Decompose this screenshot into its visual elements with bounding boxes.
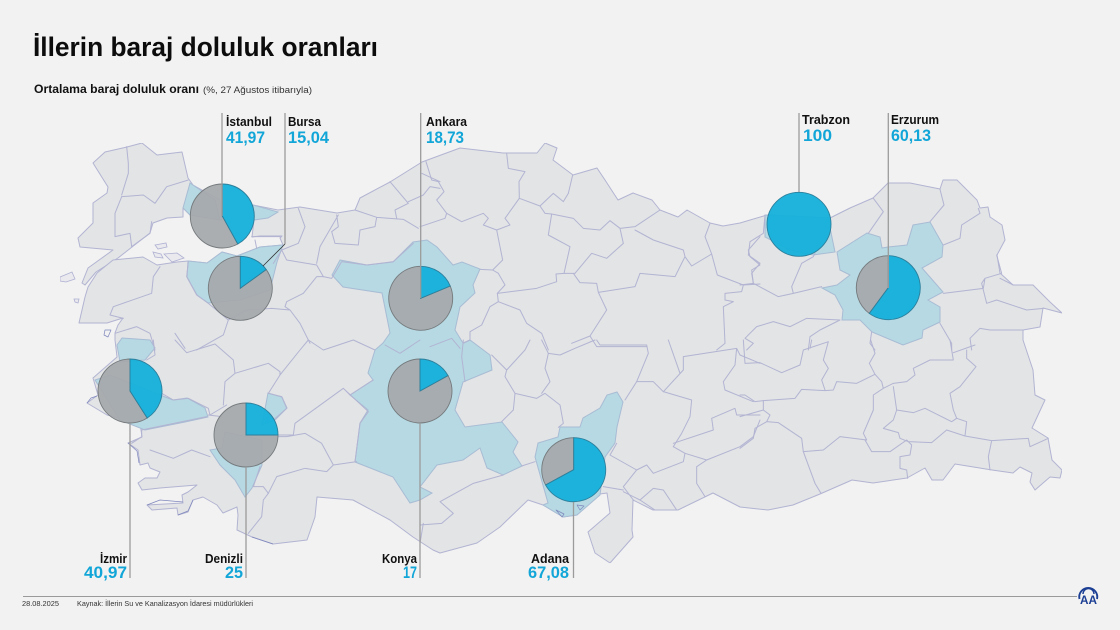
highlighted province: Trabzon (765, 215, 835, 255)
callout: İzmir 40,97: İzmir (100, 551, 127, 566)
subtitle (34, 84, 312, 96)
callout: Adana 67,08 (528, 438, 606, 582)
highlighted province: Denizli (210, 393, 287, 497)
callout: İzmir 40,97 (84, 359, 162, 582)
subtitle: (%, 27 Ağustos itibarıyla) (203, 85, 312, 95)
callout: İstanbul 41,97: İstanbul (226, 114, 272, 129)
callout: Denizli 25 (205, 403, 278, 582)
highlighted province: İzmir (95, 338, 208, 430)
footer date: 28.08.2025 (22, 599, 59, 608)
callout: Bursa 15,04: Bursa (288, 115, 322, 129)
callout: Konya 17 (382, 359, 452, 582)
callout: Ankara 18,73 (389, 113, 468, 330)
callout: Erzurum 60,13: Erzurum (891, 113, 939, 127)
footer rule (23, 596, 1077, 598)
province borders south-centre (420, 340, 760, 543)
highlighted province: Erzurum (822, 222, 943, 345)
callout: Konya 17: Konya (382, 552, 418, 566)
callout: İzmir 40,97: 40,97 (84, 563, 127, 582)
callout: Bursa 15,04 (208, 113, 330, 320)
callout: Trabzon 100: 100 (803, 126, 832, 145)
logo: AA: AA (1080, 593, 1097, 607)
callout: Ankara 18,73: Ankara (426, 115, 468, 129)
map of Turkey (60, 143, 1062, 563)
callout: Trabzon 100: Trabzon (802, 113, 850, 127)
dark coastline detail (87, 330, 584, 544)
callout: İstanbul 41,97: 41,97 (226, 128, 265, 147)
highlighted province: Adana (535, 392, 623, 517)
province borders north-east (740, 189, 1043, 350)
province borders north-centre (420, 153, 760, 350)
callout: Konya 17: 17 (403, 563, 417, 582)
province borders west-north (110, 147, 440, 350)
highlighted province: İstanbul (183, 183, 278, 220)
land: Anatolia (79, 143, 1062, 563)
callout: Trabzon 100 (767, 113, 850, 256)
callout: Bursa 15,04: 15,04 (288, 128, 330, 147)
callout: Erzurum 60,13: 60,13 (891, 126, 931, 145)
land: Thrace (78, 143, 222, 285)
callout: Adana 67,08: Adana (531, 552, 570, 566)
islands (60, 243, 184, 303)
callout: Ankara 18,73: 18,73 (426, 128, 464, 147)
province borders south-east (740, 340, 1048, 493)
callout: Denizli 25: 25 (225, 563, 243, 582)
province borders south-west (132, 340, 420, 533)
title: İllerin baraj doluluk oranları (33, 32, 378, 62)
callout: Erzurum 60,13 (856, 113, 939, 320)
callout: Denizli 25: Denizli (205, 552, 243, 566)
callout: Adana 67,08: 67,08 (528, 563, 569, 582)
highlighted province: Bursa (187, 245, 283, 303)
footer source: Kaynak: İllerin Su ve Kanalizasyon İdaresi müdürlükleri (77, 599, 253, 608)
subtitle: Ortalama baraj doluluk oranı (34, 84, 199, 96)
highlighted province: Ankara and Konya (332, 240, 522, 503)
callout: İstanbul 41,97 (190, 113, 272, 248)
